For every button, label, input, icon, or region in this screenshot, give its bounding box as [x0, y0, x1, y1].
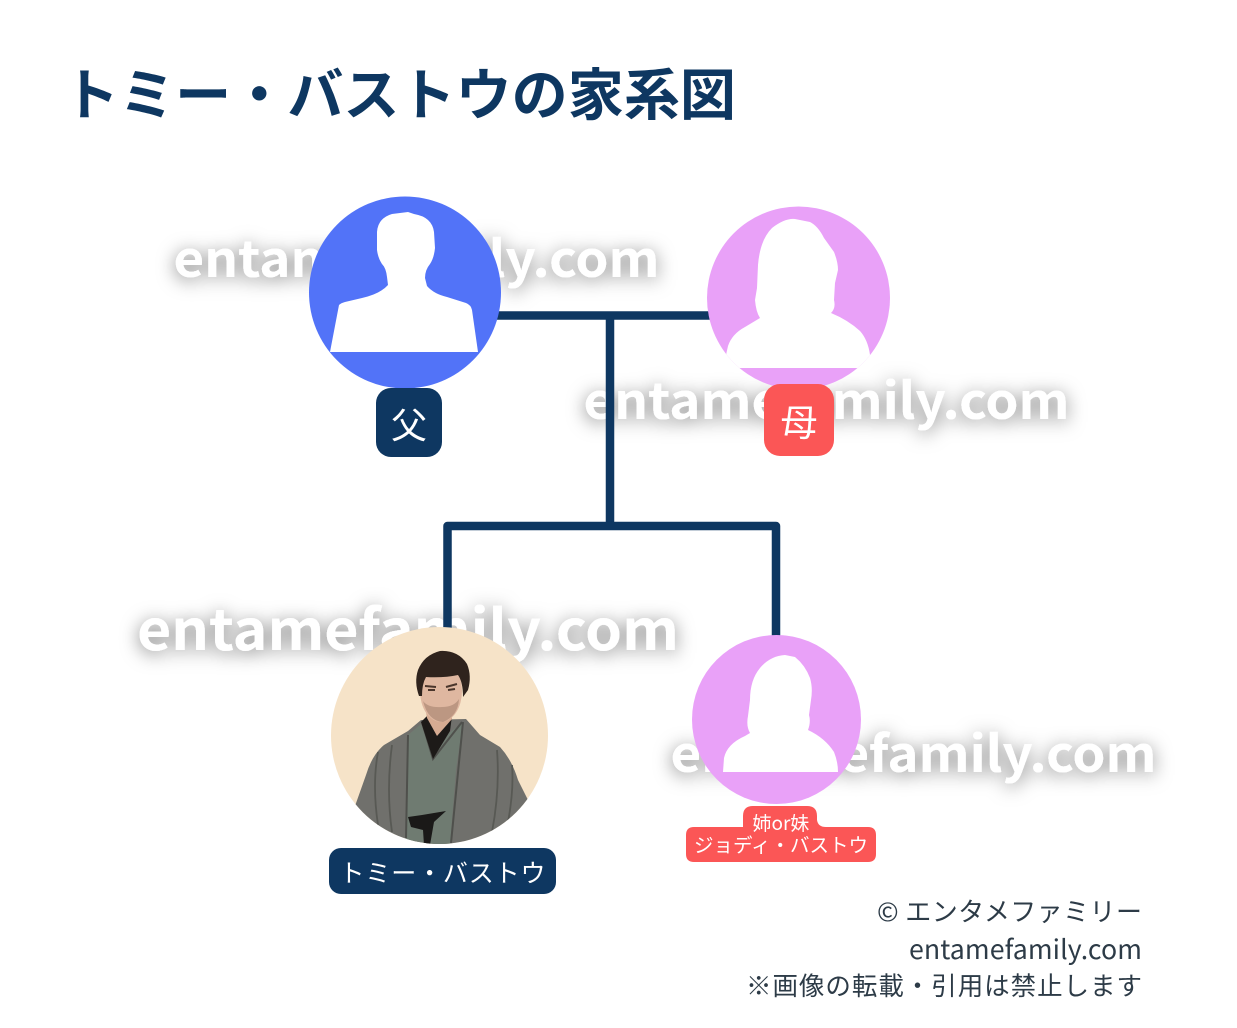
title: トミー・バストウの家系図: [63, 51, 736, 132]
hair: [416, 651, 470, 697]
inner kimono: [405, 722, 463, 845]
father portrait: [309, 196, 501, 388]
mother portrait: [707, 206, 890, 386]
sister label: [686, 806, 876, 862]
father label: 父: [391, 397, 427, 449]
brows and eyes: [425, 684, 457, 690]
neck: [426, 713, 452, 736]
copyright note: © エンタメファミリー: [877, 892, 1142, 929]
robe folds: [375, 745, 512, 832]
robe front bands: [406, 722, 463, 843]
watermarks: entamefamily.com: [584, 362, 1070, 434]
family connector lines: [448, 316, 776, 650]
watermarks: entamefamily.com: [670, 715, 1156, 787]
watermarks: [137, 220, 1156, 787]
copyright note: ※画像の転載・引用は禁止します: [746, 966, 1142, 1003]
sister label: ジョディ・バストウ: [694, 829, 868, 858]
sister label: 姉or妹: [753, 809, 809, 836]
watermarks: entamefamily.com: [174, 220, 660, 292]
robe: [355, 719, 529, 850]
collar: [421, 716, 452, 759]
obi knot: [408, 811, 446, 845]
mother label: 母: [780, 393, 818, 447]
face: [420, 675, 462, 722]
sister portrait: [692, 635, 861, 804]
father label: [376, 388, 442, 457]
copyright note: entamefamily.com: [909, 928, 1142, 967]
watermarks: entamefamily.com: [137, 586, 679, 667]
Tommy portrait photo: [331, 627, 549, 850]
Tommy label: トミー・バストウ: [340, 854, 546, 890]
copyright note: [746, 892, 1142, 1003]
mother label: [764, 384, 834, 456]
stubble: [423, 699, 459, 722]
